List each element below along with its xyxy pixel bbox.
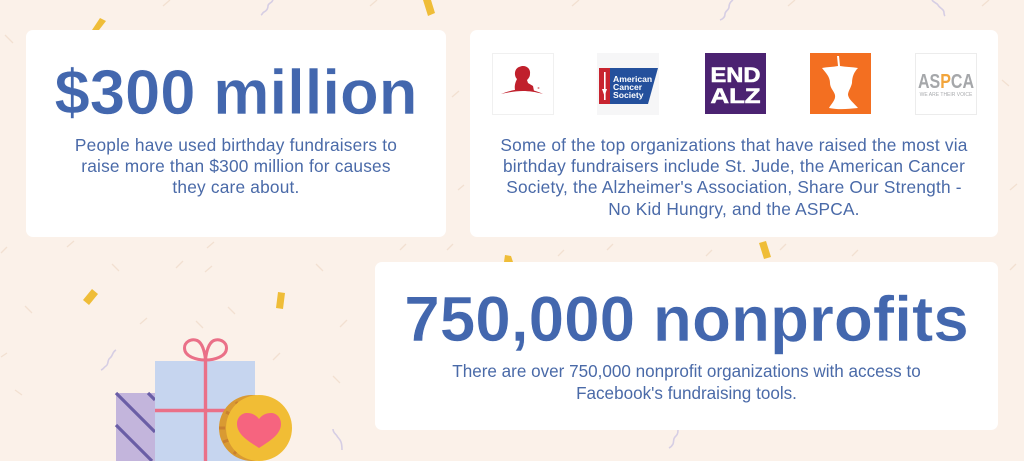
logo: End Alz: ALZ bbox=[710, 84, 760, 108]
panel: 750,000 nonprofits bbox=[375, 262, 998, 430]
illustration: gifts and heart coin bbox=[114, 338, 292, 461]
logo: American Cancer Society: American bbox=[613, 74, 652, 84]
logo: American Cancer Society: Cancer bbox=[613, 82, 643, 92]
logo: End Alz bbox=[705, 53, 766, 114]
text: nonprofit access: Facebook's fundraising tools. bbox=[576, 384, 797, 402]
text: nonprofit access bbox=[452, 362, 921, 402]
heading: 750,000 nonprofits: 750,000 nonprofits bbox=[404, 283, 969, 355]
text: organizations: birthday fundraisers include St. Jude, the American Cancer bbox=[503, 156, 965, 176]
panel: $300 million bbox=[26, 30, 446, 237]
text: organizations: No Kid Hungry, and the ASPCA. bbox=[608, 199, 860, 219]
logo: American Cancer Society: Society bbox=[613, 90, 644, 100]
icon: blue gift with ribbon bbox=[155, 340, 255, 461]
text: organizations: Some of the top organizations that have raised the most via bbox=[500, 135, 968, 155]
text: birthday fundraisers: People have used birthday fundraisers to bbox=[75, 135, 397, 155]
logo: No Kid Hungry apple core bbox=[810, 53, 871, 114]
heading: $300 million: $300 million bbox=[55, 58, 417, 128]
logo: ASPCA bbox=[915, 53, 977, 115]
text: birthday fundraisers: they care about. bbox=[172, 177, 300, 197]
logo: End Alz: END bbox=[710, 63, 760, 87]
text: organizations bbox=[500, 135, 968, 219]
logo: St. Jude bbox=[492, 53, 554, 115]
text: birthday fundraisers bbox=[75, 135, 397, 197]
text: birthday fundraisers: raise more than $300 million for causes bbox=[81, 156, 391, 176]
text: organizations: Society, the Alzheimer's Association, Share Our Strength - bbox=[506, 177, 962, 197]
logo: American Cancer Society bbox=[597, 53, 659, 115]
icon: purple gift bbox=[116, 393, 155, 461]
logo: ASPCA: WE ARE THEIR VOICE bbox=[920, 92, 973, 98]
icon: heart coin bbox=[219, 395, 292, 461]
panel: top organizations bbox=[470, 30, 998, 237]
confetti: gold pieces bbox=[83, 0, 771, 309]
text: nonprofit access: There are over 750,000 nonprofit organizations with access to bbox=[452, 362, 921, 381]
